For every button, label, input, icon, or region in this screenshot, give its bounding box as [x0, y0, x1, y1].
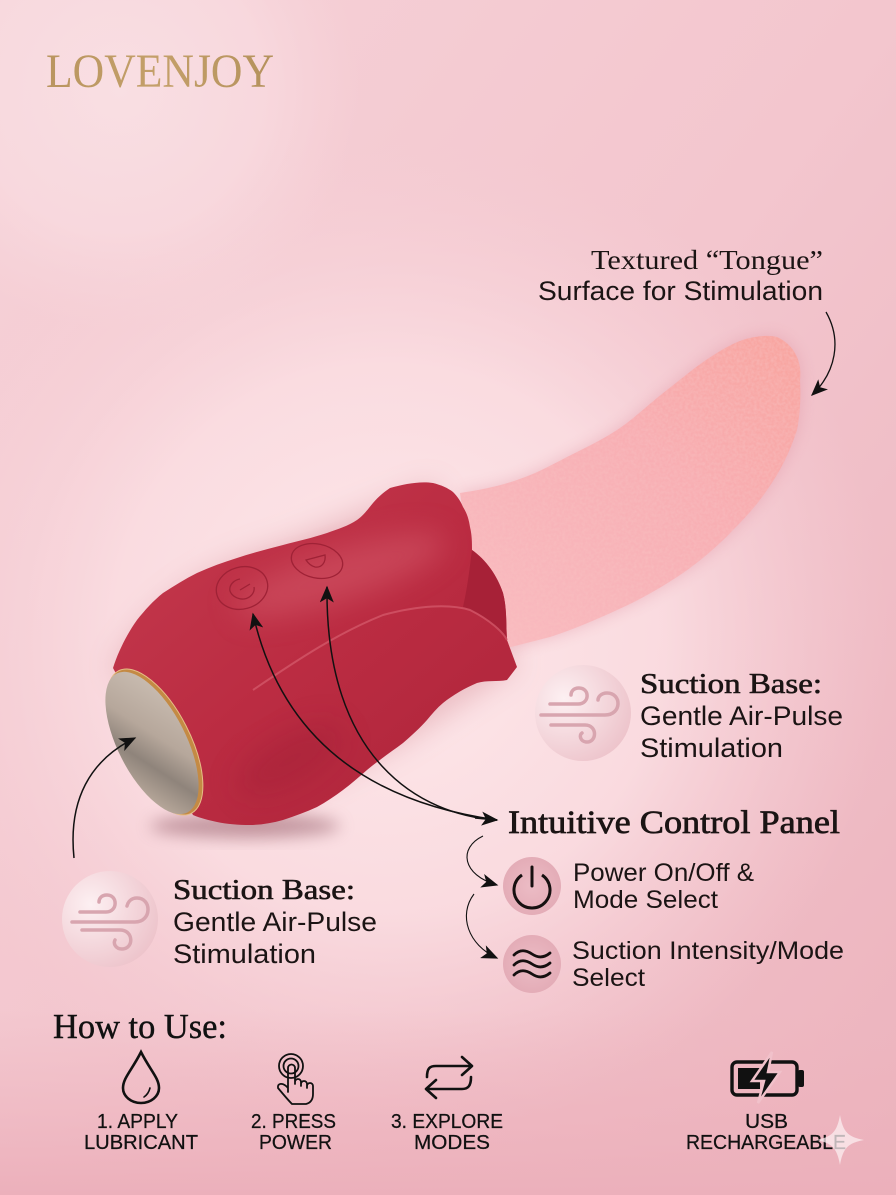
rose body [113, 482, 517, 825]
icon: wind right [535, 665, 631, 761]
usb rechargeable [686, 1052, 846, 1154]
step 2: press power [251, 1054, 336, 1154]
usb rechargeable: RECHARGEABLE [686, 1132, 846, 1154]
tongue shadow [460, 336, 800, 648]
arrow: to suction base [73, 738, 135, 858]
step 1: apply lubricant: LUBRICANT [84, 1132, 198, 1154]
icon: power [503, 857, 561, 915]
callout: textured tongue surface: Surface for Stimulation [538, 276, 823, 306]
inner petal shadow [463, 550, 507, 640]
power button [211, 561, 273, 615]
usb rechargeable: USB [745, 1111, 788, 1133]
panel: intuitive control panel: Select [572, 964, 645, 992]
step 2: press power: POWER [259, 1132, 332, 1154]
panel: intuitive control panel: Mode Select [573, 886, 718, 914]
callout: suction base right: Stimulation [640, 733, 783, 763]
callout: suction base right [535, 665, 843, 763]
icon: drop [123, 1052, 159, 1103]
panel: intuitive control panel: Intuitive Control Panel [508, 805, 840, 841]
step 2: press power: 2. PRESS [251, 1111, 336, 1133]
tongue [460, 336, 800, 648]
heading: how to use: How to Use: [53, 1007, 227, 1046]
callout: suction base right: Gentle Air-Pulse [640, 701, 843, 731]
callout: suction base left: Gentle Air-Pulse [173, 907, 377, 937]
step 1: apply lubricant: 1. APPLY [97, 1111, 178, 1133]
callout: suction base right: Suction Base: [640, 668, 822, 700]
arrow: to control panel heading [475, 818, 497, 820]
icon: swap arrows [426, 1057, 472, 1098]
step 3: explore modes: MODES [414, 1132, 490, 1154]
arrow: to power button [253, 614, 497, 820]
arrow: to tongue tip [812, 312, 835, 395]
outer petal crease [253, 606, 507, 690]
arrow: to mode button [327, 587, 497, 820]
mode button [288, 539, 346, 583]
callout: suction base left: Stimulation [173, 939, 316, 969]
icon: battery [732, 1052, 804, 1103]
icon: sparkle watermark [816, 1115, 864, 1165]
product illustration [86, 336, 800, 838]
body sheen [227, 516, 453, 634]
icon: touch hand [278, 1054, 313, 1104]
icon: suction waves [503, 935, 561, 993]
callout: textured tongue surface: Textured “Tongue” [591, 245, 823, 275]
callout: suction base left: Suction Base: [173, 874, 355, 906]
callout: suction base left [62, 871, 377, 969]
panel: intuitive control panel: Power On/Off & [573, 859, 754, 887]
step 1: apply lubricant [84, 1052, 198, 1154]
step 3: explore modes [391, 1057, 503, 1154]
icon: wind left [62, 871, 158, 967]
gold ring [87, 655, 223, 829]
panel: intuitive control panel: Suction Intensity/Mode [572, 937, 844, 965]
metal disc [86, 658, 218, 828]
callout: textured tongue surface [538, 245, 823, 306]
logo: Lovenjoy: LOVENJOY [46, 45, 274, 98]
arrow: to suction item [466, 894, 497, 958]
arrow: to power item [467, 836, 497, 885]
floor shadow [150, 814, 340, 838]
step 3: explore modes: 3. EXPLORE [391, 1111, 503, 1133]
panel: intuitive control panel [466, 805, 844, 993]
body glow [113, 483, 517, 823]
